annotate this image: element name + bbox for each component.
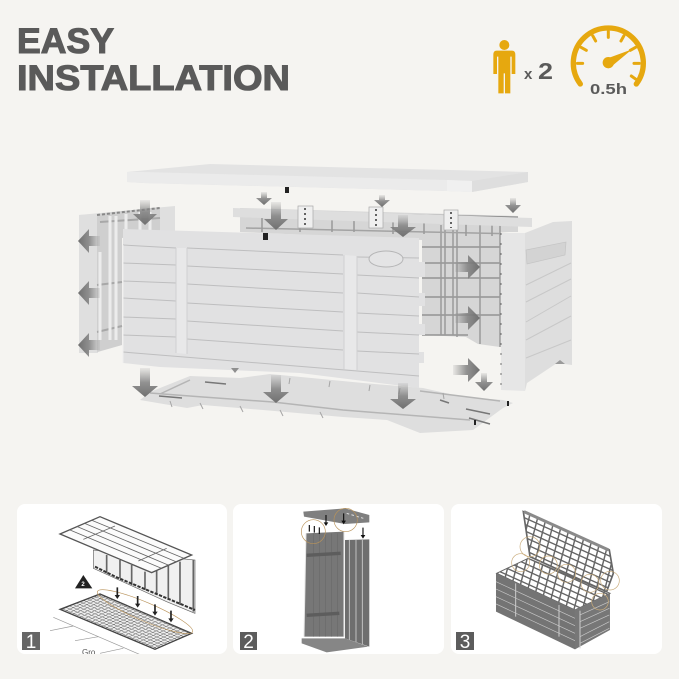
front panel — [123, 229, 425, 388]
base grid — [60, 594, 192, 649]
icon: gauge 0.5h: 0.5h — [590, 81, 627, 98]
icon: person x 2 — [493, 40, 553, 93]
title — [17, 22, 290, 98]
step number 2 — [240, 632, 257, 653]
panel: step 1 — [17, 504, 227, 657]
step number 2: 2 — [243, 632, 254, 653]
step number 1 — [22, 632, 40, 653]
title: EASY — [17, 22, 114, 61]
exploded storage box illustration — [78, 164, 572, 433]
oval handle — [369, 251, 403, 267]
upper panel — [93, 550, 195, 613]
lid — [127, 164, 528, 193]
left panel — [79, 206, 175, 353]
arrows — [78, 192, 521, 409]
orange hinge circles — [512, 537, 619, 610]
icon: person x 2: 2 — [538, 58, 553, 84]
panel: step 2 — [233, 504, 444, 654]
orange ellipse — [96, 589, 193, 634]
base — [302, 638, 368, 652]
title: INSTALLATION — [17, 59, 290, 98]
step number 1: 1 — [26, 632, 36, 653]
box side — [575, 593, 610, 649]
back panel — [233, 206, 532, 347]
black arrows — [309, 513, 363, 536]
panel: step 3 — [451, 504, 662, 654]
warning triangle — [75, 575, 92, 588]
icon: gauge 0.5h — [573, 28, 643, 98]
front panel — [304, 532, 344, 637]
box interior — [497, 558, 610, 610]
latch — [263, 233, 268, 240]
step number 3: 3 — [460, 632, 470, 653]
black arrows — [117, 587, 171, 621]
ground label: Gro — [82, 648, 96, 657]
lid — [60, 517, 192, 573]
raised lid grid — [523, 512, 613, 592]
step number 3 — [456, 632, 474, 653]
orange circles — [301, 520, 325, 544]
warning number: 2 — [81, 582, 85, 588]
right grid panel — [345, 539, 369, 647]
ground lines — [50, 617, 143, 656]
right end panel — [501, 221, 572, 391]
icon: person x 2: x — [524, 66, 533, 83]
base tray — [140, 374, 513, 433]
lid — [303, 508, 369, 524]
box front — [496, 573, 575, 649]
